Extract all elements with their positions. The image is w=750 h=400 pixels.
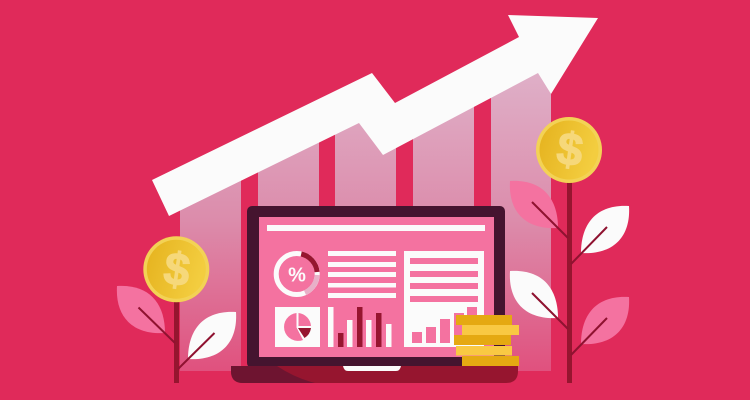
right stem — [567, 170, 572, 383]
right plant veins — [532, 202, 607, 355]
right top-right white leaf — [581, 206, 629, 253]
growth arrow — [152, 15, 598, 216]
laptop screen — [259, 217, 494, 357]
laptop base — [231, 366, 518, 383]
column chart — [328, 307, 392, 347]
right bottom-left white leaf — [510, 271, 558, 318]
left dollar coin: $ — [161, 241, 193, 297]
right top-left pink leaf — [510, 181, 558, 228]
right dollar coin — [536, 117, 602, 183]
percent donut chart: % — [288, 264, 306, 286]
table and bars panel — [404, 251, 484, 347]
left plant veins — [138, 308, 214, 369]
screen header bar — [267, 225, 485, 231]
laptop — [231, 206, 518, 383]
text lines — [328, 251, 396, 298]
right dollar coin: $ — [554, 121, 586, 177]
left stem — [174, 290, 179, 383]
right plant — [510, 117, 629, 383]
left pink leaf — [117, 286, 165, 333]
left white leaf — [188, 312, 236, 359]
coin stack — [454, 315, 519, 366]
laptop lid — [247, 206, 505, 368]
bar chart backdrop — [180, 70, 551, 371]
right bottom-right pink leaf — [581, 297, 629, 344]
left plant — [117, 236, 236, 383]
left dollar coin — [143, 236, 209, 302]
percent donut chart — [276, 254, 317, 294]
pie chart panel — [275, 307, 320, 347]
